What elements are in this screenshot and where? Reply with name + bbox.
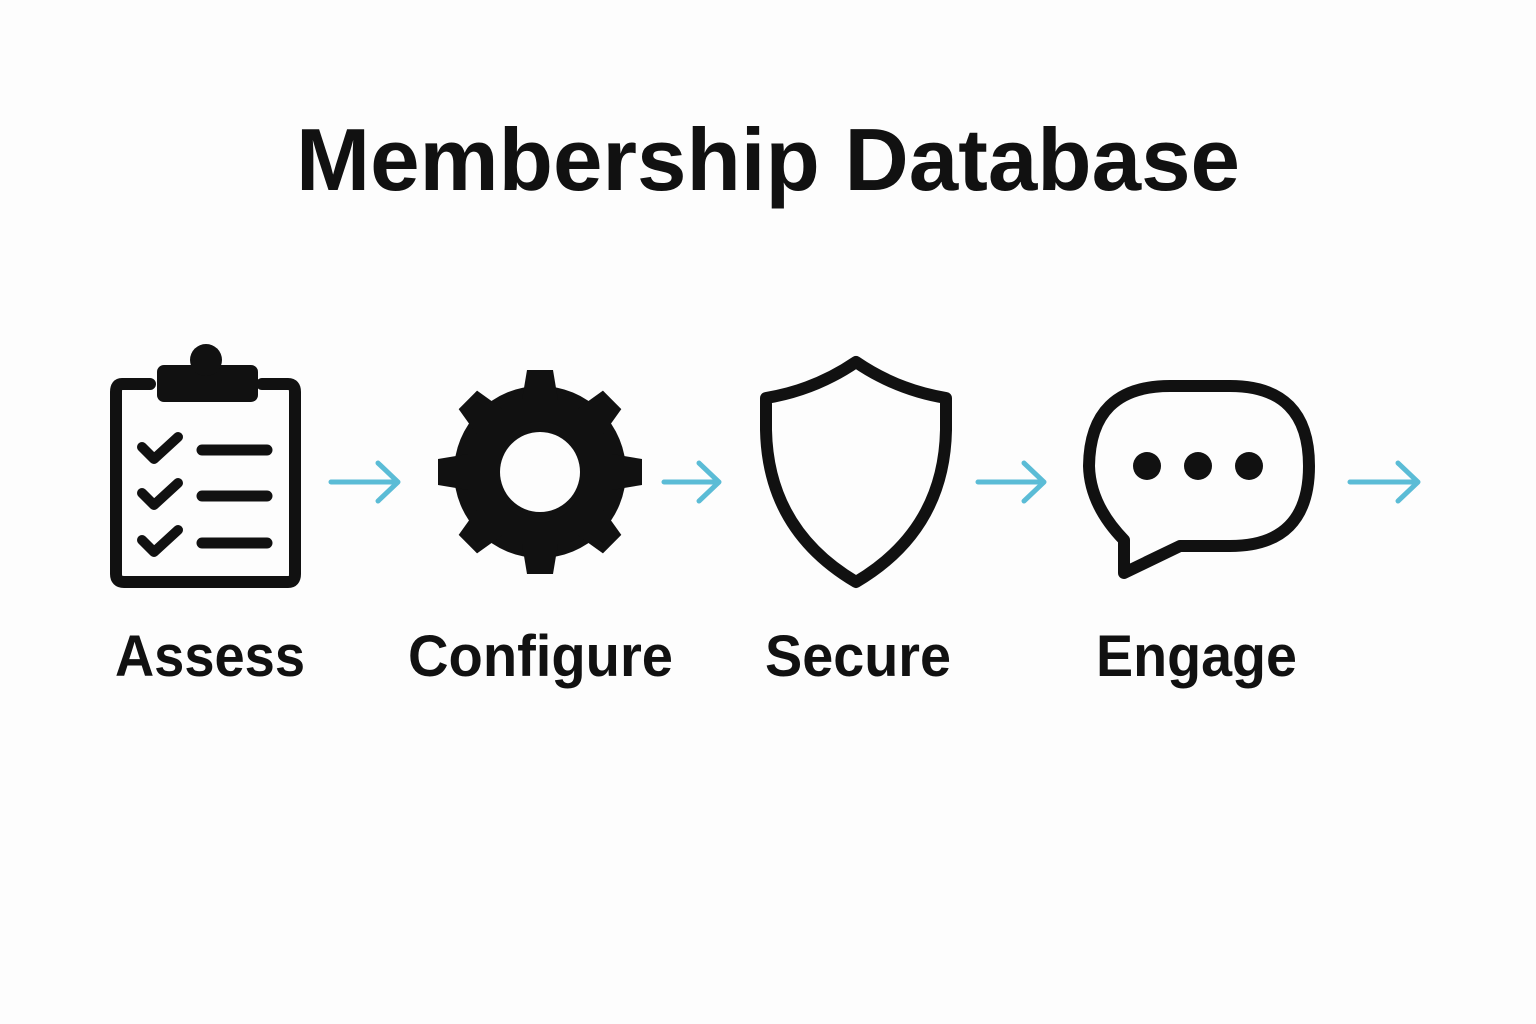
arrow 1 bbox=[331, 463, 398, 501]
title: Membership Database bbox=[296, 110, 1240, 209]
label: Configure: Configure bbox=[408, 624, 673, 689]
icon: shield bbox=[766, 362, 946, 582]
arrow 2 bbox=[664, 463, 719, 501]
label: Secure: Secure bbox=[765, 624, 951, 689]
icon: speech bubble bbox=[1089, 386, 1309, 573]
arrow 4 bbox=[1350, 463, 1418, 501]
icon: clipboard bbox=[116, 344, 295, 582]
arrow 3 bbox=[978, 463, 1044, 501]
icon: gear bbox=[438, 370, 642, 574]
label: Assess: Assess bbox=[115, 624, 305, 689]
label: Engage: Engage bbox=[1096, 624, 1297, 689]
